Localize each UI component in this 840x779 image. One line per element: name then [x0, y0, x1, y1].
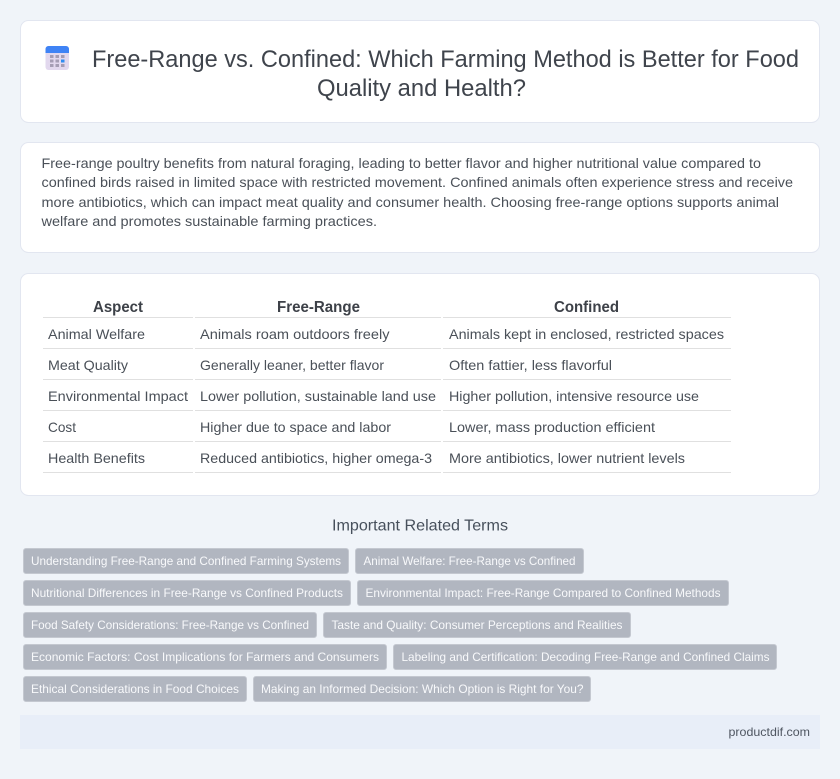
table row: health benefits: Health Benefits [48, 450, 145, 466]
title: Quality and Health? [317, 75, 526, 102]
panel: comparison table [20, 274, 820, 496]
table row: environmental impact: Environmental Impact [48, 388, 188, 404]
tag: food safety [24, 612, 316, 638]
tag: food safety: Food Safety Considerations: Free-Range vs Confined [31, 618, 309, 632]
table row: health benefits [48, 450, 685, 466]
table row: animal welfare [48, 326, 724, 342]
text block: summary: welfare and promotes sustainable farming practices. [40, 213, 377, 229]
text block: summary: confined birds raised in limited space with restricted movement. Confined animals often experience stress and receive [42, 174, 793, 190]
tag: informed decision [254, 676, 590, 702]
table row: meat quality [48, 357, 612, 373]
tag: environmental impact: Environmental Impact: Free-Range Compared to Confined Methods [366, 586, 720, 600]
tag: animal welfare [356, 548, 584, 574]
table row: environmental impact [48, 388, 699, 404]
panel: summary paragraph [20, 142, 820, 252]
footer [20, 715, 820, 749]
text block: summary: more antibiotics, which can impact meat quality and consumer health. Choosing free-range options supports animal [42, 194, 779, 210]
table row: meat quality: Often fattier, less flavorful [449, 357, 612, 373]
tag: economic factors [24, 644, 386, 670]
table header row [93, 299, 619, 316]
tag: nutritional differences [24, 580, 350, 606]
table header row: Confined [554, 299, 619, 316]
text block: summary: Free-range poultry benefits from natural foraging, leading to better flavor and higher nutritional value compared to [42, 155, 761, 171]
table row: health benefits: Reduced antibiotics, higher omega-3 [200, 450, 432, 466]
panel: header [20, 20, 820, 122]
title [92, 46, 799, 102]
footer: productdif.com [728, 725, 810, 739]
text block: summary [40, 155, 793, 229]
table row: animal welfare: Animals roam outdoors freely [200, 326, 390, 342]
tag: nutritional differences: Nutritional Differences in Free-Range vs Confined Products [31, 586, 343, 600]
tag: taste and quality: Taste and Quality: Consumer Perceptions and Realities [332, 618, 622, 632]
tag: labeling and certification: Labeling and Certification: Decoding Free-Range and Confined Claims [402, 650, 770, 664]
tag list: related terms [24, 548, 776, 702]
tag: economic factors: Economic Factors: Cost Implications for Farmers and Consumers [31, 650, 379, 664]
table row: environmental impact: Lower pollution, sustainable land use [200, 388, 436, 404]
tag: understanding systems [24, 548, 348, 574]
icon: calendar [46, 46, 69, 70]
table row: cost: Lower, mass production efficient [449, 419, 655, 435]
tag: labeling and certification [394, 644, 776, 670]
table row: cost: Higher due to space and labor [200, 419, 391, 435]
table row: meat quality: Meat Quality [48, 357, 128, 373]
table header row: Aspect [93, 299, 144, 316]
table row: cost [48, 419, 655, 435]
tag: ethical considerations [24, 676, 246, 702]
table row: environmental impact: Higher pollution, intensive resource use [449, 388, 699, 404]
heading: important related terms: Important Related Terms [332, 518, 508, 534]
tag: informed decision: Making an Informed Decision: Which Option is Right for You? [261, 682, 584, 696]
title: Free-Range vs. Confined: Which Farming Method is Better for Food [92, 46, 799, 73]
table header row: Free-Range [277, 299, 360, 316]
table row: health benefits: More antibiotics, lower nutrient levels [449, 450, 685, 466]
table row: animal welfare: Animal Welfare [48, 326, 145, 342]
tag: environmental impact [358, 580, 728, 606]
table row: animal welfare: Animals kept in enclosed, restricted spaces [449, 326, 724, 342]
tag: taste and quality [324, 612, 630, 638]
table row: meat quality: Generally leaner, better flavor [200, 357, 384, 373]
tag: ethical considerations: Ethical Considerations in Food Choices [31, 682, 239, 696]
tag: animal welfare: Animal Welfare: Free-Range vs Confined [364, 554, 576, 568]
tag: understanding systems: Understanding Free-Range and Confined Farming Systems [31, 554, 341, 568]
table row: cost: Cost [48, 419, 76, 435]
